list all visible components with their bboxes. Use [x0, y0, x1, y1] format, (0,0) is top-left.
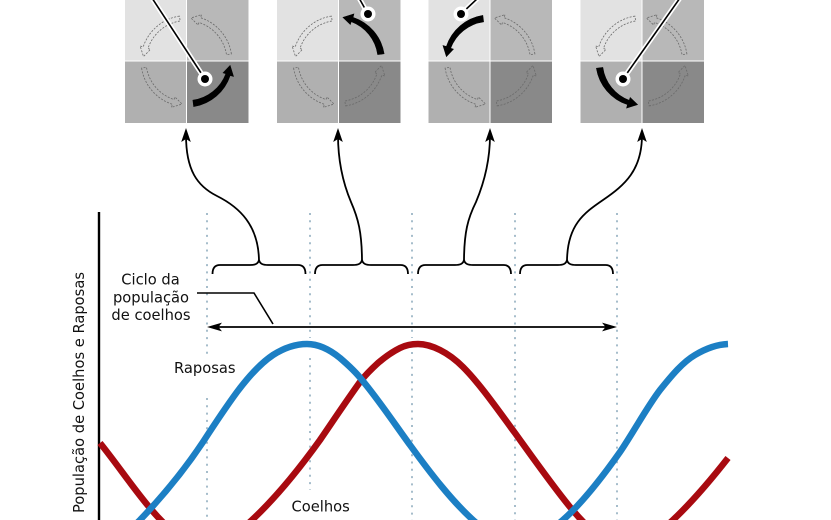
panel: quadrant diagram 4	[580, 0, 704, 123]
double arrow: one full cycle	[207, 323, 617, 331]
arrow: bracket 1 to panel 1	[181, 128, 259, 262]
label: rabbit population cycle: Ciclo da	[121, 272, 180, 288]
dotted vertical time guides	[207, 213, 617, 520]
curve: rabbits (red)	[100, 344, 728, 520]
arrow: bracket 3 to panel 3	[464, 128, 495, 262]
label: Raposas: Raposas	[174, 360, 236, 377]
icon: black arrow, bottom-right quadrant	[193, 66, 234, 107]
y axis line	[98, 212, 100, 520]
panel: quadrant diagram 3	[428, 0, 552, 123]
y axis label: População de Coelhos e Raposas	[71, 272, 88, 513]
curve: foxes (blue)	[118, 344, 728, 520]
arrow: bracket 4 to panel 4	[567, 128, 647, 262]
panel: quadrant diagram 1	[125, 0, 248, 123]
pointer line to bottom-left quadrant	[616, 0, 680, 86]
leader line from cycle label to arrow	[197, 293, 273, 324]
label: rabbit population cycle: de coelhos	[111, 307, 191, 324]
label: Coelhos: Coelhos	[292, 498, 350, 516]
label: rabbit population cycle: população	[113, 290, 189, 306]
pointer line to bottom-right quadrant	[152, 0, 212, 86]
pointer line to top-right quadrant	[359, 0, 376, 22]
icon: black arrow, bottom-left quadrant	[596, 67, 638, 108]
label: rabbit population cycle	[111, 272, 191, 324]
icon: black arrow, top-right quadrant	[343, 14, 384, 55]
icon: black arrow, top-left quadrant	[443, 15, 484, 56]
arrow: bracket 2 to panel 2	[333, 128, 362, 262]
bracket 4	[520, 260, 613, 274]
bracket 2	[315, 260, 408, 274]
bracket 1	[212, 260, 306, 274]
panel: quadrant diagram 2	[277, 0, 400, 123]
bracket 3	[418, 260, 511, 274]
pointer line to top-left quadrant	[454, 0, 478, 22]
